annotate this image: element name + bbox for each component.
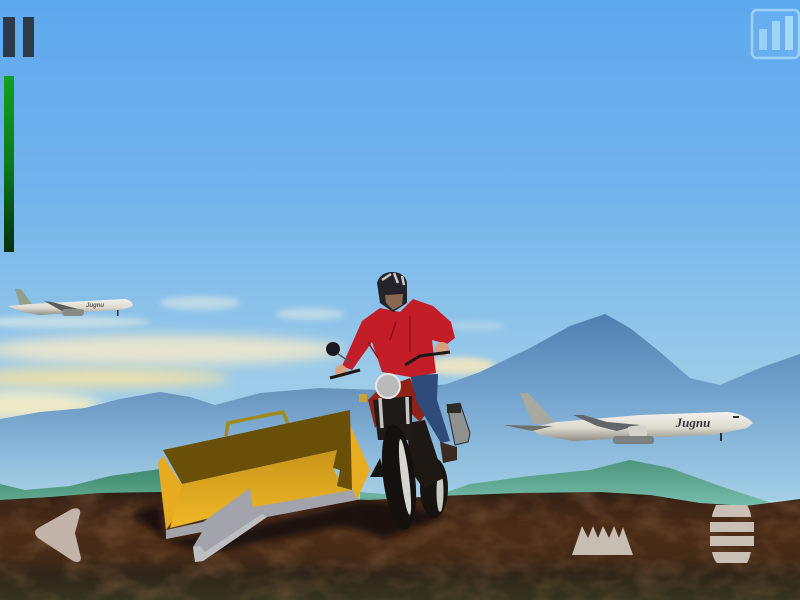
face xyxy=(385,294,403,310)
left side plate xyxy=(158,456,182,530)
helmet xyxy=(377,272,407,312)
airplane: small left: Jugnu xyxy=(86,303,104,309)
bucket handle xyxy=(226,412,288,436)
ground shadow xyxy=(133,502,445,552)
ground xyxy=(0,490,800,600)
bike tank xyxy=(368,378,425,428)
loader bucket xyxy=(158,410,370,562)
mountains: big peak xyxy=(430,314,800,500)
control: left arrow xyxy=(35,508,81,562)
clouds xyxy=(0,296,505,419)
icon: stats button xyxy=(752,10,799,58)
left boot xyxy=(370,458,385,477)
motorcycle and rider xyxy=(326,272,470,532)
bucket back wall xyxy=(163,410,352,490)
airplane: large right xyxy=(503,393,753,444)
airplane: small left xyxy=(8,289,133,316)
pannier box xyxy=(447,403,470,445)
icon: pause button xyxy=(3,17,34,57)
handlebars and mirror xyxy=(330,352,450,378)
rear wheel xyxy=(420,458,448,518)
bike rear body xyxy=(407,420,444,488)
right boot xyxy=(440,442,457,463)
control: brake spikes xyxy=(572,526,633,555)
mountains: left range xyxy=(0,384,470,500)
bike front frame xyxy=(373,396,412,440)
bucket floor xyxy=(170,450,353,528)
airplane: large right: Jugnu xyxy=(675,415,710,430)
front wheel xyxy=(377,422,421,532)
shirt xyxy=(342,299,455,377)
right side plate xyxy=(345,420,370,500)
grey blade xyxy=(166,488,357,562)
green hills xyxy=(0,460,775,510)
control: throttle barrel xyxy=(710,505,754,563)
hands xyxy=(335,365,347,377)
forks xyxy=(380,397,408,428)
headlight xyxy=(376,374,400,398)
fuel gauge bar xyxy=(4,76,14,252)
jeans xyxy=(410,374,450,443)
